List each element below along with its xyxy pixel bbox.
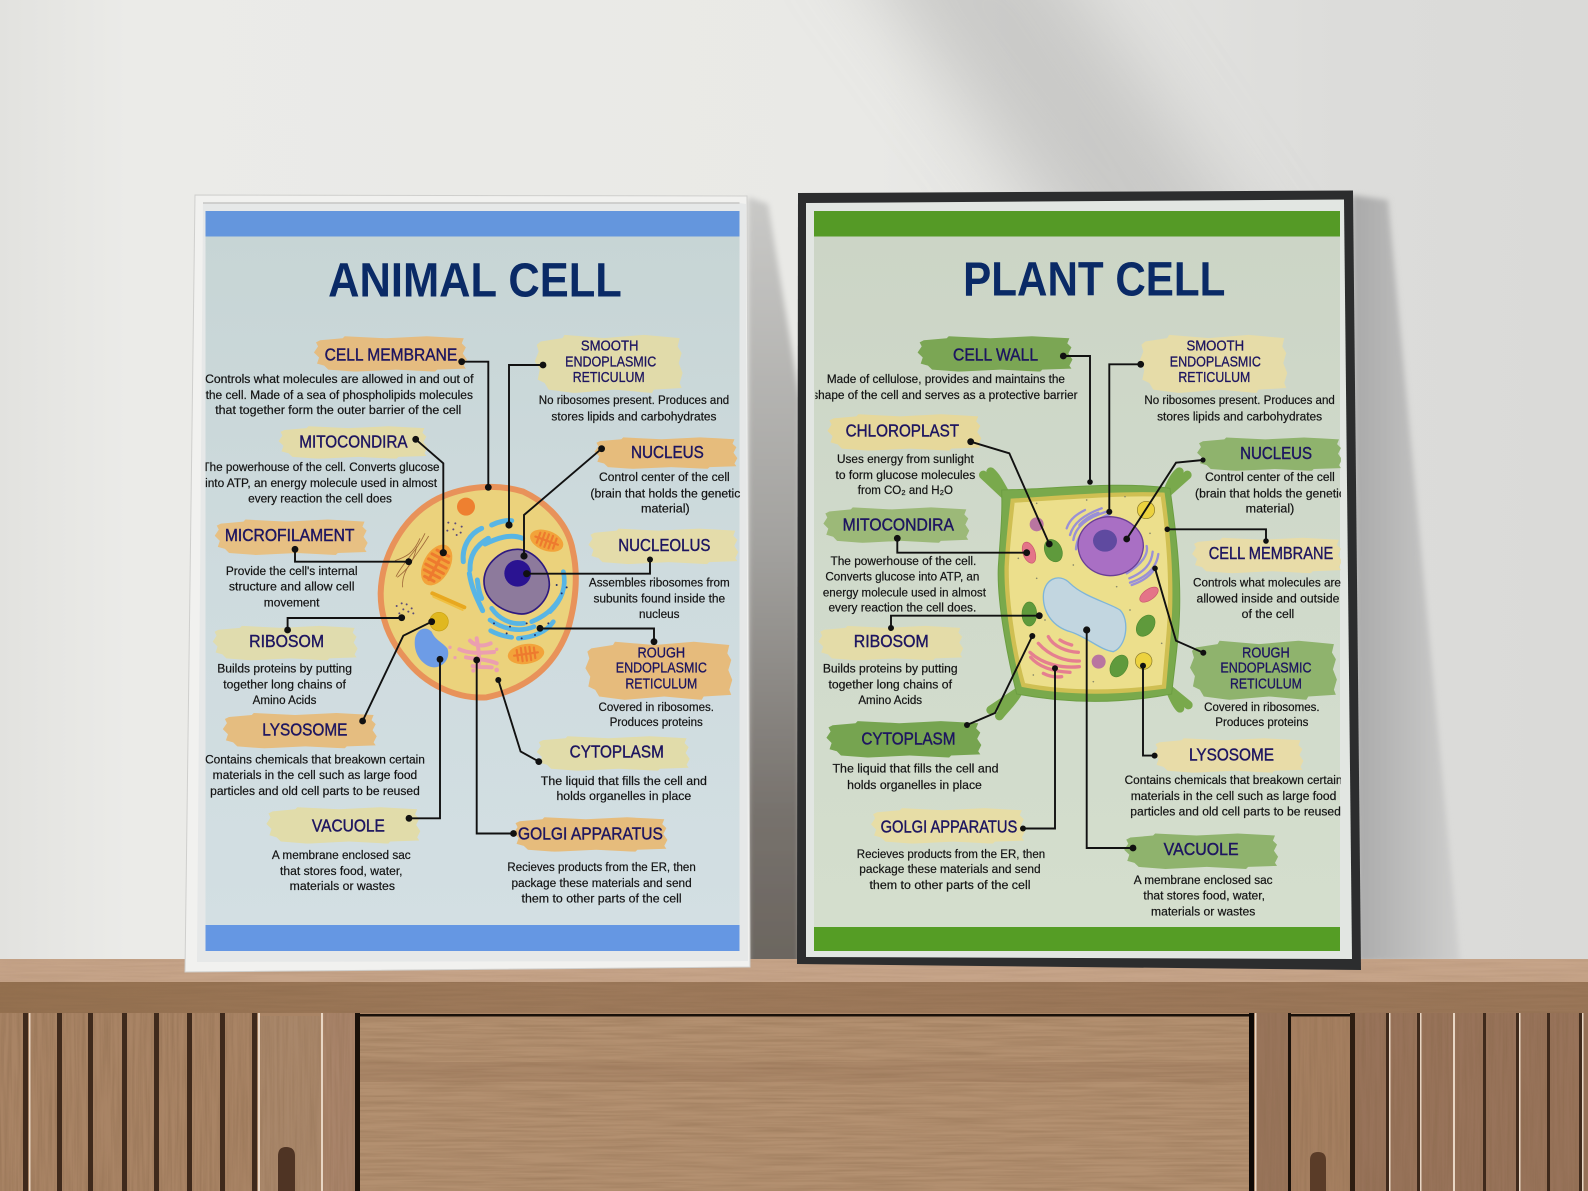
poster paper (206, 236, 740, 926)
text: mitocondira description: The powerhouse of the cell. (830, 554, 976, 568)
connector lines: animal cell (284, 358, 657, 837)
label: lysosome (1154, 738, 1303, 773)
text: rough er description (1204, 700, 1320, 729)
text: nucleus description: Control center of the cell (1205, 470, 1335, 484)
label: mitocondira: MITOCONDIRA (299, 432, 408, 452)
cell membrane and cytoplasm (1007, 494, 1170, 691)
organelle: mitochondrion left (415, 539, 459, 591)
text: vacuole description: A membrane enclosed sac (272, 848, 411, 862)
text: cell wall description: Made of cellulose, provides and maintains the (827, 372, 1065, 386)
organelle: orange vesicle (457, 498, 475, 516)
text: golgi description: package these materials and send (859, 862, 1041, 876)
text: golgi description: Recieves products from the ER, then (507, 860, 696, 874)
text: chloroplast description (836, 452, 975, 497)
text: golgi description (857, 847, 1045, 892)
text: nucleolus description: nucleus (639, 607, 680, 621)
label: cell membrane: CELL MEMBRANE (1209, 543, 1333, 563)
top blue bar (206, 211, 740, 236)
label: nucleolus: NUCLEOLUS (618, 535, 710, 555)
label: lysosome: LYSOSOME (1189, 745, 1274, 765)
text: nucleus description: Control center of the cell (599, 470, 730, 484)
text: cell membrane description: Controls what molecules are allowed in and out of (205, 372, 474, 386)
cell wall corners (983, 472, 1188, 716)
organelle: magenta vesicles (1030, 517, 1106, 669)
label: smooth endoplasmic reticulum (1139, 335, 1287, 393)
label: nucleus (594, 437, 737, 469)
text: golgi description: Recieves products from the ER, then (857, 847, 1045, 861)
text: lysosome description: Contains chemicals that breakown certain (1125, 773, 1342, 787)
label: rough endoplasmic reticulum: ENDOPLASMIC (616, 660, 707, 676)
text: ribosom description: together long chains of (828, 678, 953, 692)
text: cell membrane description: Controls what molecules are (1193, 575, 1341, 589)
text: golgi description (507, 860, 696, 905)
cell membrane and cytoplasm (381, 487, 576, 698)
text: cytoplasm description: holds organelles in place (557, 789, 692, 803)
text: chloroplast description: Uses energy from sunlight (837, 452, 974, 466)
label: cytoplasm: CYTOPLASM (861, 728, 956, 748)
label: smooth endoplasmic reticulum: SMOOTH (1186, 338, 1244, 354)
label: ribosom (213, 626, 358, 660)
ribosomes on rough er (493, 584, 568, 639)
text: vacuole description (1134, 873, 1273, 919)
text: rough er description (599, 700, 714, 729)
organelle: centriole (432, 593, 464, 610)
text: lysosome description (205, 753, 425, 798)
organelle: golgi apparatus (1030, 637, 1079, 677)
text: nucleus description: (brain that holds the genetic (1195, 486, 1345, 500)
text: lysosome description: particles and old cell parts to be reused (210, 784, 420, 798)
black picture frame (797, 190, 1361, 970)
organelle: free ribosome dots left (396, 602, 414, 614)
organelle: chloroplasts (1022, 537, 1159, 680)
label: microfilament: MICROFILAMENT (225, 525, 355, 545)
text: ribosom description: together long chains of (223, 678, 347, 692)
top green bar (814, 211, 1340, 236)
text: ribosom description: Amino Acids (253, 693, 317, 707)
text: nucleolus description: subunits found inside the (593, 592, 726, 606)
text: cell membrane description: the cell. Made of a sea of phospholipids molecules (206, 388, 473, 402)
label: smooth endoplasmic reticulum: RETICULUM (1178, 370, 1250, 386)
wooden cabinet (0, 959, 1588, 1191)
organelle: rough er (1127, 546, 1158, 585)
text: rough er description: Produces proteins (1215, 715, 1309, 729)
label: vacuole (266, 807, 420, 844)
poster: animal cell (185, 195, 750, 972)
label: cell membrane (314, 336, 467, 372)
label: nucleus (1197, 437, 1342, 471)
label: golgi apparatus: GOLGI APPARATUS (518, 824, 663, 844)
label: rough endoplasmic reticulum: ROUGH (638, 645, 685, 661)
label: golgi apparatus: GOLGI APPARATUS (881, 816, 1017, 836)
cell wall (998, 485, 1180, 701)
text: golgi description: package these materials and send (511, 876, 692, 890)
label: ribosom: RIBOSOM (854, 631, 929, 651)
text: smooth er description: stores lipids and carbohydrates (1157, 409, 1322, 423)
white picture frame (185, 195, 750, 972)
text: ribosom description: Builds proteins by putting (823, 661, 958, 675)
text: mitocondira description (203, 460, 440, 505)
text: cytoplasm description: holds organelles in place (847, 778, 982, 792)
label: golgi apparatus (513, 817, 667, 852)
organelle: smooth er (1067, 508, 1110, 549)
organelle: vacuole (1043, 578, 1126, 652)
label: smooth endoplasmic reticulum: ENDOPLASMIC (565, 355, 657, 371)
label: chloroplast: CHLOROPLAST (846, 420, 960, 440)
organelle: vacuole (415, 629, 448, 667)
label: cell wall: CELL WALL (953, 345, 1038, 365)
text: microfilament description: structure and allow cell (229, 579, 354, 593)
label: nucleus: NUCLEUS (631, 442, 704, 462)
label: mitocondira (823, 507, 969, 543)
organelle: mitochondria (1020, 540, 1161, 605)
bottom blue bar (206, 925, 740, 951)
label: mitocondira (279, 426, 427, 459)
text: cytoplasm description: The liquid that fills the cell and (832, 762, 999, 776)
connector lines: plant cell (888, 353, 1269, 851)
label: smooth endoplasmic reticulum: ENDOPLASMIC (1170, 355, 1261, 371)
text: smooth er description (539, 393, 729, 423)
text: mitocondira description: energy molecule used in almost (823, 586, 987, 600)
poster paper (814, 236, 1340, 927)
label: rough endoplasmic reticulum: RETICULUM (625, 677, 697, 693)
text: mitocondira description (823, 554, 987, 615)
text: mitocondira description: into ATP, an energy molecule used in almost (205, 476, 438, 490)
label: golgi apparatus (871, 808, 1025, 844)
text: mitocondira description: Converts glucose into ATP, an (825, 569, 979, 583)
organelle: nucleus (484, 549, 549, 614)
plant poster text (812, 253, 1345, 919)
text: cell membrane description (1193, 575, 1341, 621)
label: rough endoplasmic reticulum: RETICULUM (1230, 677, 1302, 693)
organelle: nucleus (1078, 517, 1143, 576)
text: cell membrane description: that together form the outer barrier of the cell (215, 403, 461, 417)
label: lysosome (223, 713, 377, 748)
label: rough endoplasmic reticulum (585, 642, 732, 700)
text: nucleolus description (589, 575, 730, 621)
label: lysosome: LYSOSOME (262, 719, 347, 739)
text: lysosome description: Contains chemicals that breakown certain (205, 753, 425, 767)
diagram: animal cell (381, 487, 576, 698)
label: nucleolus (588, 529, 738, 564)
text: microfilament description (226, 564, 358, 610)
organelle: free ribosome dots top (446, 522, 463, 536)
text: vacuole description: that stores food, water, (280, 864, 403, 878)
poster: plant cell (797, 190, 1361, 970)
label: vacuole: VACUOLE (1164, 839, 1239, 859)
text: ribosom description (217, 661, 352, 707)
bottom green bar (814, 927, 1340, 951)
label: cytoplasm (826, 721, 981, 758)
text: vacuole description: materials or wastes (1151, 905, 1255, 919)
animal poster text (203, 254, 740, 905)
text: chloroplast description: to form glucose molecules (836, 468, 975, 482)
label: rough endoplasmic reticulum (1190, 641, 1337, 700)
text: rough er description: Produces proteins (610, 715, 703, 729)
text: nucleolus description: Assembles ribosomes from (589, 575, 730, 589)
label: smooth endoplasmic reticulum (535, 335, 683, 393)
label: cell membrane (1192, 538, 1342, 573)
organelle: lysosome (430, 612, 448, 631)
diagram: plant cell (983, 472, 1188, 716)
text: nucleus description (1195, 470, 1345, 515)
text: golgi description: them to other parts of the cell (522, 891, 682, 905)
label: rough endoplasmic reticulum: ROUGH (1242, 645, 1290, 661)
text: nucleus description: material) (1246, 501, 1294, 515)
text: lysosome description: particles and old cell parts to be reused (1130, 804, 1341, 818)
organelle: mitochondrion upper right (527, 525, 566, 556)
organelle: microfilaments (395, 533, 429, 587)
text: chloroplast description: from CO₂ and H₂O (858, 483, 953, 497)
text: cytoplasm description: The liquid that fills the cell and (541, 774, 707, 788)
text: cell wall description (812, 372, 1078, 402)
text: ribosom description: Amino Acids (858, 693, 922, 707)
label: vacuole: VACUOLE (312, 815, 385, 835)
title: animal cell: ANIMAL CELL (328, 254, 622, 308)
text: mitocondira description: every reaction the cell does. (828, 601, 976, 615)
text: smooth er description (1144, 393, 1335, 423)
text: mitocondira description: The powerhouse of the cell. Converts glucose (203, 460, 440, 474)
text: nucleus description (590, 470, 740, 515)
text: cell membrane description: of the cell (1242, 607, 1294, 621)
label: chloroplast (827, 414, 981, 451)
text: cell wall description: shape of the cell and serves as a protective barrier (812, 388, 1078, 402)
organelle: mitochondrion lower right (506, 642, 546, 666)
label: cytoplasm: CYTOPLASM (570, 742, 664, 762)
label: smooth endoplasmic reticulum: SMOOTH (581, 338, 639, 354)
label: cell wall (918, 336, 1072, 372)
text: rough er description: Covered in ribosomes. (1204, 700, 1320, 714)
text: cell membrane description: allowed inside and outside (1197, 592, 1340, 606)
text: lysosome description (1125, 773, 1342, 818)
title: plant cell: PLANT CELL (963, 253, 1225, 307)
organelle: rough endoplasmic reticulum (490, 572, 564, 638)
text: golgi description: them to other parts of the cell (869, 878, 1030, 892)
organelle: nucleolus (504, 560, 531, 587)
text: rough er description: Covered in ribosomes. (599, 700, 714, 714)
text: cytoplasm description (832, 762, 999, 792)
text: cytoplasm description (541, 774, 707, 803)
label: vacuole (1124, 834, 1278, 869)
organelle: nucleolus (1093, 530, 1117, 552)
label: cytoplasm (537, 736, 690, 771)
inner mat (806, 200, 1352, 959)
text: smooth er description: No ribosomes present. Produces and (1144, 393, 1335, 407)
text: mitocondira description: every reaction the cell does (248, 491, 392, 505)
text: lysosome description: materials in the cell such as large food (213, 768, 417, 782)
label: ribosom (818, 626, 963, 660)
organelle: golgi apparatus (459, 638, 497, 667)
organelle: small dots in cytoplasm (1017, 496, 1162, 682)
label: mitocondira: MITOCONDIRA (843, 515, 954, 535)
text: microfilament description: Provide the cell's internal (226, 564, 358, 578)
text: lysosome description: materials in the cell such as large food (1131, 789, 1336, 803)
organelle: smooth endoplasmic reticulum (463, 521, 523, 611)
label: ribosom: RIBOSOM (249, 631, 324, 651)
text: cell membrane description (205, 372, 474, 417)
label: nucleus: NUCLEUS (1240, 443, 1312, 463)
inner bevel and mat (197, 203, 748, 962)
text: nucleus description: material) (641, 501, 690, 515)
text: nucleus description: (brain that holds the genetic (590, 486, 740, 500)
label: smooth endoplasmic reticulum: RETICULUM (573, 370, 645, 386)
organelle: lysosomes (1135, 501, 1155, 669)
label: microfilament (215, 520, 368, 555)
label: cell membrane: CELL MEMBRANE (325, 345, 457, 365)
text: ribosom description: Builds proteins by putting (217, 661, 352, 675)
text: microfilament description: movement (264, 596, 320, 610)
label: rough endoplasmic reticulum: ENDOPLASMIC (1220, 660, 1312, 676)
text: vacuole description: that stores food, water, (1143, 888, 1265, 902)
text: ribosom description (823, 661, 958, 707)
text: smooth er description: No ribosomes present. Produces and (539, 393, 729, 407)
text: vacuole description (272, 848, 411, 893)
text: vacuole description: materials or wastes (290, 879, 395, 893)
text: smooth er description: stores lipids and carbohydrates (551, 409, 717, 423)
text: vacuole description: A membrane enclosed sac (1134, 873, 1273, 887)
